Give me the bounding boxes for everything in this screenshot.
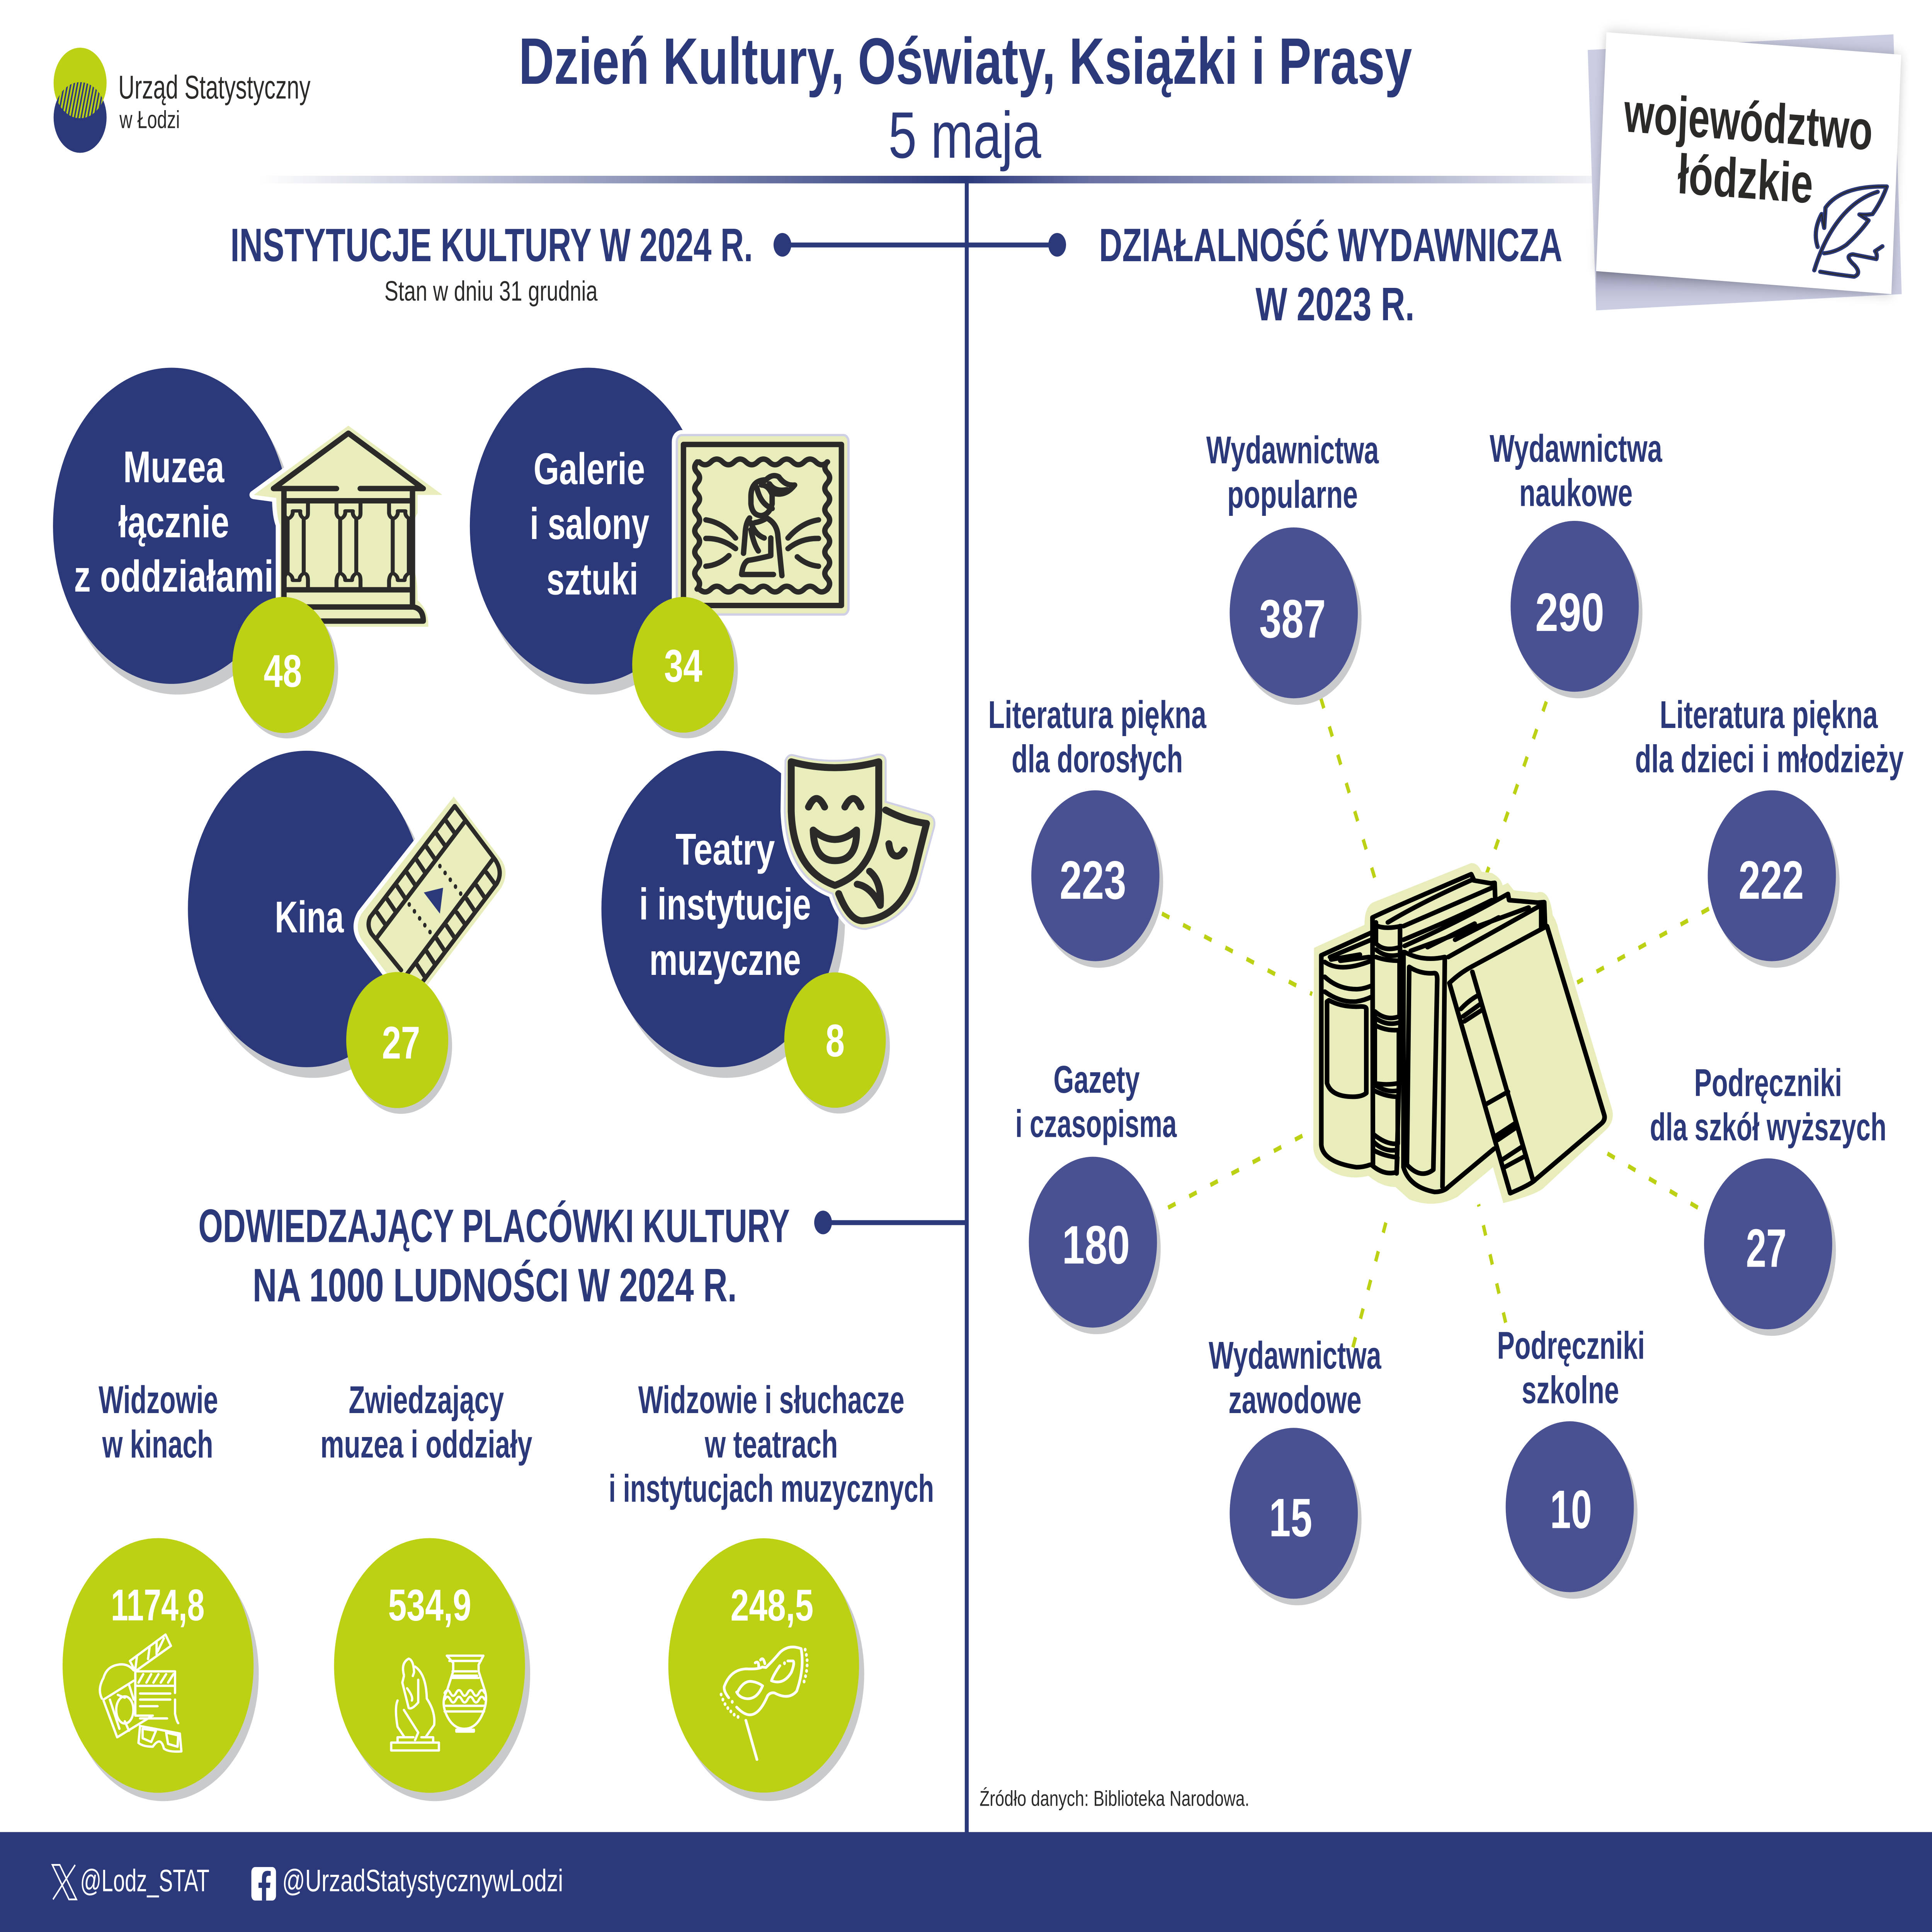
node: wydawnictwa popularne 387: popularne [1227, 473, 1358, 516]
heading: odwiedzający placówki kultury: ODWIEDZAJĄCY PLACÓWKI KULTURY [198, 1200, 790, 1252]
panel: muzea: z oddziałami [74, 551, 274, 601]
stat: zwiedzający 534,9 [334, 1538, 530, 1801]
node: wydawnictwa zawodowe 15 [1209, 1334, 1381, 1605]
icon: framed picture [677, 435, 849, 614]
source note: Źródło danych: Biblioteka Narodowa. [980, 1787, 1249, 1811]
heading: instytucje kultury: INSTYTUCJE KULTURY W 2024 R. [230, 219, 753, 271]
node: podręczniki dla szkół wyższych 27 [1650, 1061, 1886, 1336]
vertical divider [965, 177, 969, 1834]
panel: galerie [470, 368, 849, 738]
label: widzowie w kinach: w kinach [102, 1422, 213, 1466]
panel: teatry: muzyczne [649, 935, 801, 985]
label: widzowie w kinach [99, 1378, 218, 1466]
label: zwiedzający muzea [320, 1378, 532, 1466]
node: wydawnictwa zawodowe 15: zawodowe [1228, 1378, 1362, 1421]
node: literatura dla dzieci 222 [1635, 693, 1904, 968]
panel: kina: Kina [275, 892, 344, 942]
node: podręczniki dla szkół wyższych 27: Podręczniki [1694, 1061, 1842, 1104]
panel: muzea [53, 368, 442, 738]
label: widzowie i słuchacze [609, 1378, 934, 1510]
stat: zwiedzający 534,9: 534,9 [388, 1580, 471, 1630]
node: literatura dla dorosłych 223: dla dorosłych [1012, 737, 1183, 781]
node: wydawnictwa naukowe 290: naukowe [1519, 471, 1633, 514]
node: literatura dla dzieci 222: dla dzieci i młodzieży [1635, 737, 1904, 781]
node: gazety i czasopisma 180: i czasopisma [1015, 1102, 1177, 1145]
icon: sculpture and vase [391, 1656, 486, 1750]
panel: teatry: Teatry [675, 824, 775, 874]
icon: carnival mask [720, 1647, 808, 1760]
sticky note: województwo łódzkie [1588, 32, 1902, 310]
connector: odwiedzający [814, 1211, 966, 1234]
node: wydawnictwa naukowe 290: Wydawnictwa [1490, 427, 1662, 470]
footer bar [0, 1832, 1932, 1932]
stat: widzowie i słuchacze 248,5: 248,5 [731, 1580, 813, 1630]
logo: Urząd Statystyczny w Łodzi: w Łodzi [119, 106, 180, 133]
node: gazety i czasopisma 180: Gazety [1053, 1058, 1140, 1101]
node: wydawnictwa naukowe 290 [1490, 427, 1662, 698]
icon: X [53, 1865, 77, 1900]
connector: section headings [774, 233, 1066, 257]
panel: kina: 27 [382, 1017, 420, 1068]
label: widzowie i słuchacze: i instytucjach muzycznych [609, 1467, 934, 1510]
node: gazety i czasopisma 180: 180 [1062, 1215, 1130, 1276]
node: podręczniki szkolne 10: 10 [1550, 1480, 1592, 1540]
node: wydawnictwa zawodowe 15: 15 [1269, 1488, 1312, 1548]
subtitle: date: 5 maja [888, 98, 1041, 172]
node: literatura dla dzieci 222: 222 [1738, 850, 1804, 911]
panel: kina [188, 751, 505, 1114]
node: wydawnictwa popularne 387: Wydawnictwa [1206, 429, 1379, 472]
sticky note: województwo łódzkie: województwo [1622, 81, 1874, 162]
logo: Urząd Statystyczny w Łodzi [54, 48, 311, 153]
heading: odwiedzający placówki kultury [198, 1200, 790, 1311]
node: wydawnictwa popularne 387 [1206, 429, 1379, 705]
node: gazety i czasopisma 180 [1015, 1058, 1177, 1334]
footer bar: @Lodz_STAT [80, 1863, 209, 1898]
node: podręczniki szkolne 10: Podręczniki [1497, 1324, 1645, 1367]
label: widzowie i słuchacze: w teatrach [704, 1422, 838, 1466]
node: podręczniki dla szkół wyższych 27: dla szkół wyższych [1650, 1105, 1886, 1149]
panel: galerie: Galerie [534, 444, 645, 494]
icon: film ticket [358, 797, 505, 1002]
title: Dzień Kultury, Oświaty, Książki i Prasy [519, 24, 1412, 98]
panel: teatry: 8 [825, 1015, 845, 1066]
node: podręczniki szkolne 10: szkolne [1522, 1368, 1619, 1412]
footer bar: @UrzadStatystycznywLodzi [282, 1863, 563, 1898]
panel: teatry: i instytucje [639, 879, 811, 929]
panel: teatry [601, 751, 934, 1114]
icon: feather [1814, 187, 1887, 277]
heading: działalność wydawnicza: W 2023 R. [1255, 278, 1415, 330]
note: stan w dniu: Stan w dniu 31 grudnia [384, 276, 598, 307]
icon: stack of books [1313, 863, 1613, 1204]
stat: widzowie i słuchacze 248,5 [668, 1538, 864, 1801]
panel: galerie: 34 [664, 641, 702, 692]
heading: odwiedzający placówki kultury: NA 1000 LUDNOŚCI W 2024 R. [253, 1259, 737, 1311]
panel: galerie: sztuki [546, 554, 638, 604]
node: podręczniki szkolne 10 [1497, 1324, 1645, 1599]
node: wydawnictwa zawodowe 15: Wydawnictwa [1209, 1334, 1381, 1377]
panel: muzea: łącznie [118, 497, 229, 547]
logo: Urząd Statystyczny w Łodzi: Urząd Statystyczny [118, 69, 311, 105]
node: literatura dla dorosłych 223: 223 [1060, 850, 1126, 911]
node: wydawnictwa naukowe 290: 290 [1535, 582, 1604, 643]
sticky note: województwo łódzkie: łódzkie [1677, 143, 1815, 215]
stat: widzowie w kinach 1174,8 [63, 1538, 259, 1801]
header gradient bar [259, 176, 1602, 184]
icon: cinema clapper, popcorn, glasses [100, 1634, 181, 1752]
heading: działalność wydawnicza [1099, 219, 1562, 330]
label: zwiedzający muzea: muzea i oddziały [320, 1422, 532, 1466]
heading: działalność wydawnicza: DZIAŁALNOŚĆ WYDAWNICZA [1099, 219, 1562, 271]
label: zwiedzający muzea: Zwiedzający [349, 1378, 504, 1421]
icon: facebook [252, 1867, 276, 1901]
node: literatura dla dzieci 222: Literatura piękna [1660, 693, 1878, 736]
stat: widzowie w kinach 1174,8: 1174,8 [111, 1580, 204, 1630]
dashed connectors to books [1162, 698, 1709, 1347]
icon: theatre masks [785, 755, 934, 929]
panel: galerie: i salony [530, 499, 649, 549]
node: podręczniki dla szkół wyższych 27: 27 [1746, 1218, 1787, 1279]
node: literatura dla dorosłych 223: Literatura piękna [988, 693, 1207, 736]
icon: museum building [254, 426, 442, 627]
panel: muzea: 48 [264, 646, 302, 697]
label: widzowie w kinach: Widzowie [99, 1378, 218, 1421]
label: widzowie i słuchacze: Widzowie i słuchacze [638, 1378, 905, 1421]
node: literatura dla dorosłych 223 [988, 693, 1207, 968]
node: wydawnictwa popularne 387: 387 [1259, 589, 1326, 649]
panel: muzea: Muzea [123, 442, 225, 492]
